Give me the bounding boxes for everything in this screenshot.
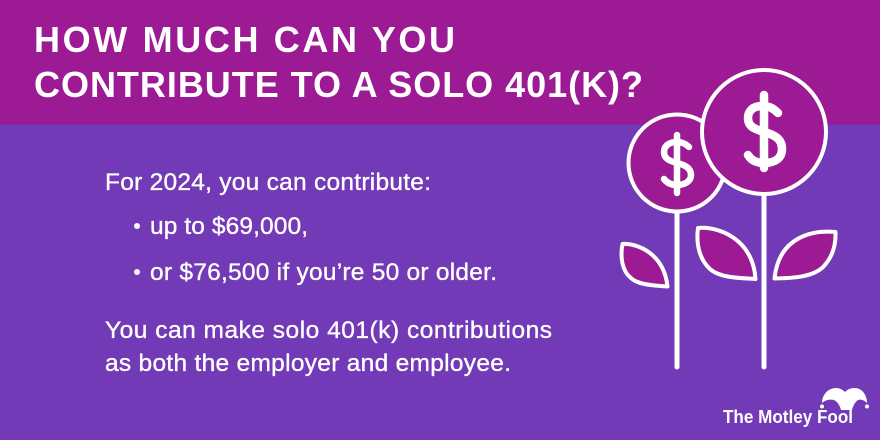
logo: The Motley Fool: The Motley Fool [723,407,853,427]
intro text: For 2024, you can contribute: [105,169,431,196]
closing text: You can make solo 401(k) contributions [105,317,552,344]
large dollar sign [748,95,782,168]
icon: jester hat [820,388,869,410]
header band [0,0,880,124]
bullet list [134,213,497,286]
icon: money flowers [622,70,836,367]
closing text: as both the employer and employee. [105,350,511,377]
middle leaf [697,228,756,279]
title: HOW MUCH CAN YOU [34,19,455,60]
right leaf [774,232,836,278]
large flower stem [762,195,766,367]
title: CONTRIBUTE TO A SOLO 401(K)? [34,64,643,105]
closing text [105,317,552,377]
title [34,19,643,105]
small left leaf [622,244,668,286]
small dollar sign [664,135,691,193]
large coin [702,70,826,194]
small coin [628,114,726,212]
logo: The Motley Fool [723,388,869,427]
small flower stem [674,213,680,367]
bullet list: or $76,500 if you’re 50 or older. [150,259,497,286]
bullet list: up to $69,000, [150,213,308,240]
